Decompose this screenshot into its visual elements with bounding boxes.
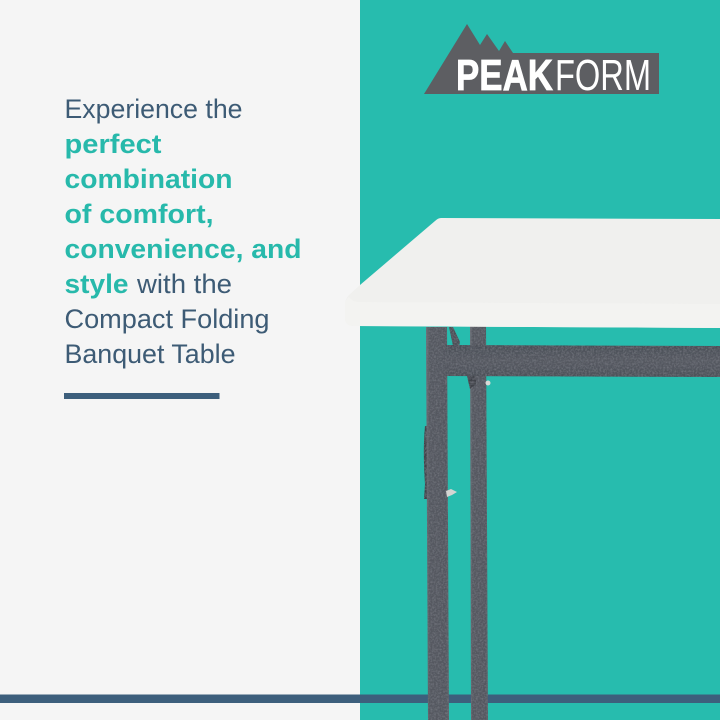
panel: teal background: [360, 0, 720, 720]
divider rule under headline: [64, 393, 220, 399]
rear table leg: [470, 326, 488, 720]
line: with the: with the: [136, 269, 232, 299]
table silhouette: [345, 218, 720, 328]
line: perfect: perfect: [64, 129, 162, 159]
panel: left background: [0, 0, 360, 720]
line: of comfort,: of comfort,: [64, 199, 214, 229]
front table leg: [426, 327, 449, 720]
table front edge: [345, 297, 720, 328]
folding brace: [449, 327, 460, 346]
line: Compact Folding: Compact Folding: [64, 304, 270, 334]
line: Banquet Table: Banquet Table: [64, 339, 236, 369]
small bracket behind crossbar: [467, 376, 476, 389]
headline text block: [64, 94, 302, 369]
logo wordmark: FORM: FORM: [555, 51, 651, 100]
bottom stripe: [0, 694, 720, 703]
logo wordmark: PEAK: PEAK: [456, 51, 553, 100]
line: combination: combination: [64, 164, 233, 194]
side latch: [424, 426, 428, 499]
logo: PeakForm: [424, 24, 659, 100]
wing bolt: [446, 489, 457, 497]
logo mountain shape: [424, 24, 659, 94]
line: style: style: [64, 269, 128, 299]
line: Experience the: Experience the: [64, 94, 242, 124]
crossbar: [446, 345, 720, 377]
line: convenience, and: convenience, and: [64, 234, 302, 264]
product photo: folding table: [345, 218, 720, 720]
bolt on crossbar: [486, 380, 490, 386]
table frame: [424, 326, 720, 720]
